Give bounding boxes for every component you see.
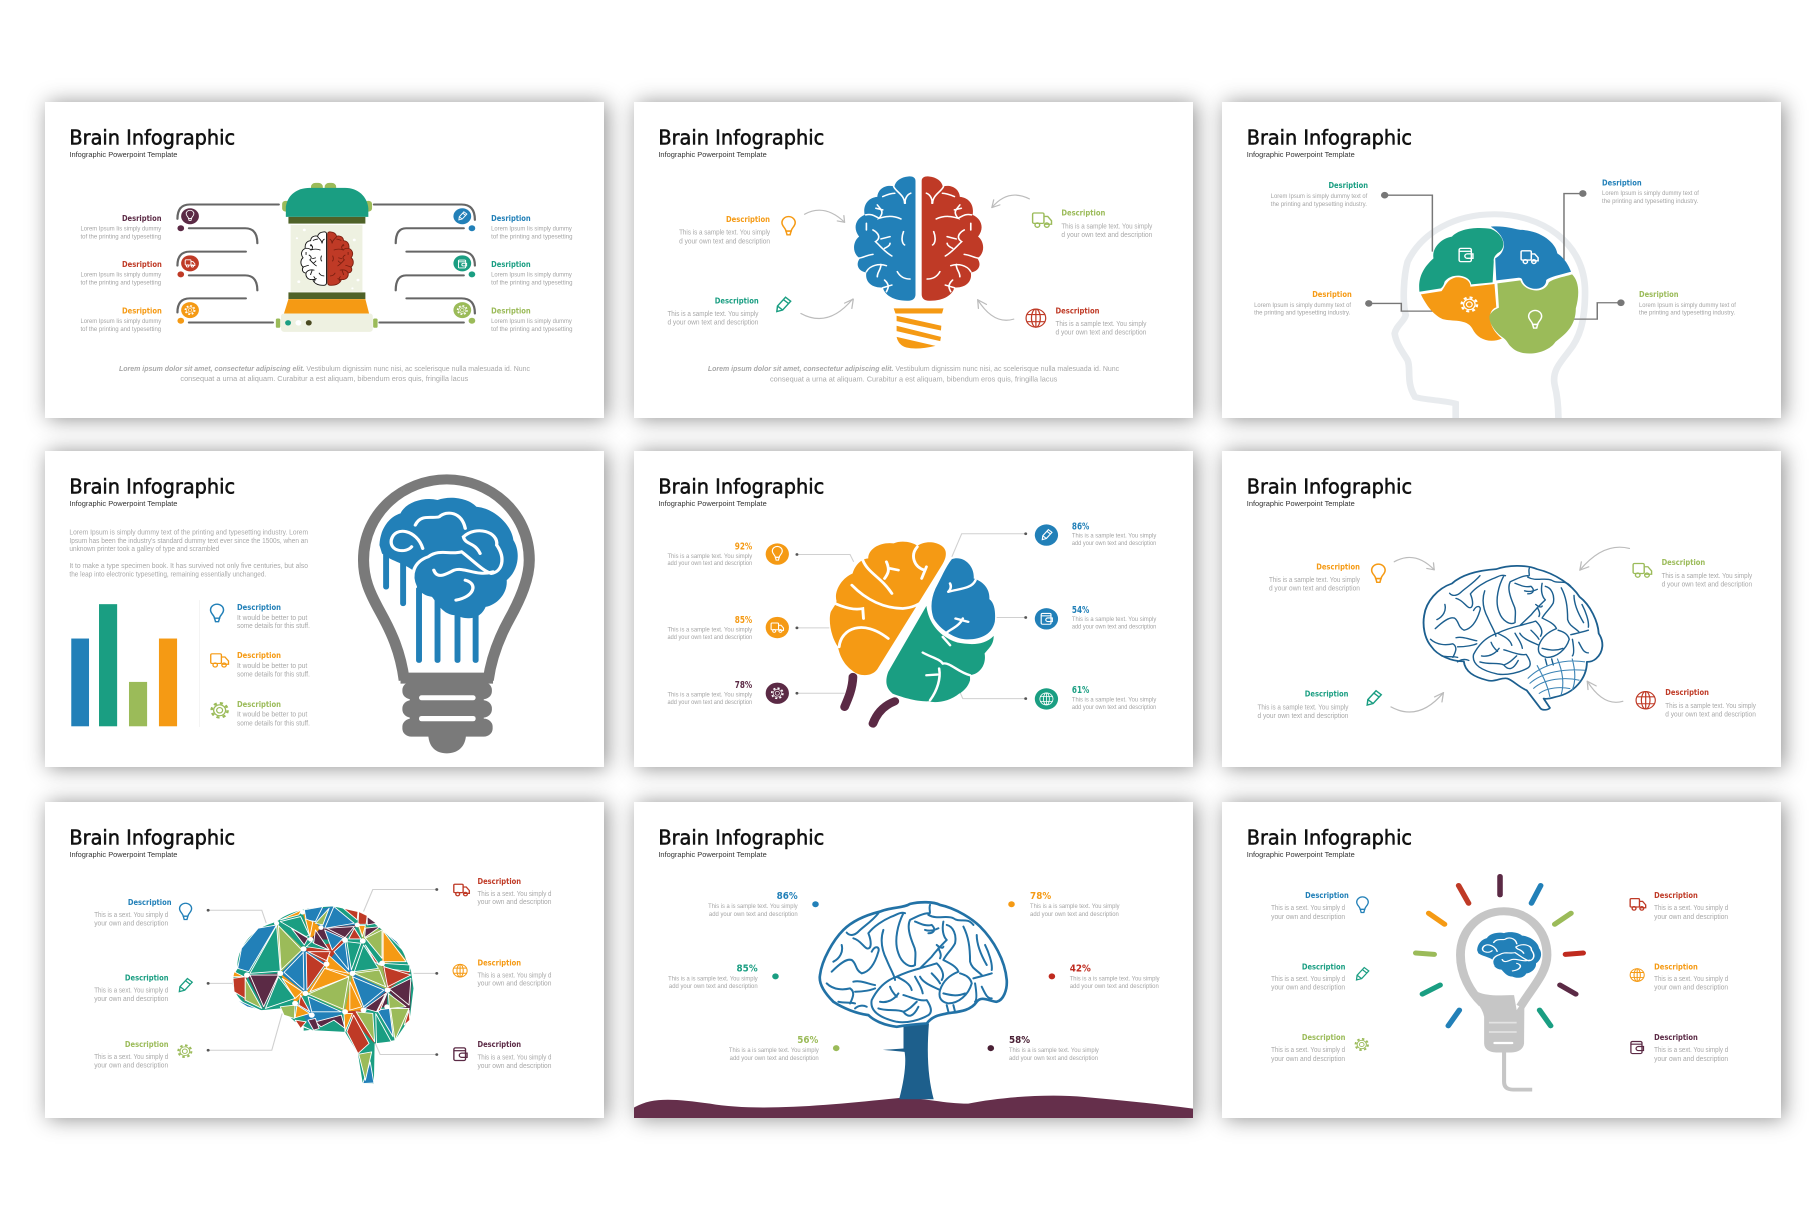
title: Infographic Powerpoint Template bbox=[658, 850, 767, 859]
callout: teal: your own and description bbox=[94, 994, 168, 1003]
callout 86%: add your own text and description bbox=[1072, 540, 1157, 547]
callout: plum: your own and description bbox=[477, 1061, 551, 1070]
callout 78%: 78% bbox=[735, 680, 753, 691]
body text: It to make a type specimen book. It has survived not only five centuries, but also bbox=[69, 561, 308, 570]
callout: green: d your own text and description bbox=[1662, 580, 1752, 588]
callout 54%: 54% bbox=[1072, 604, 1090, 616]
callout: teal bbox=[94, 973, 192, 1003]
panel: polygon brain slide bbox=[45, 802, 604, 1118]
legend: orange bbox=[211, 651, 310, 678]
callout: plum bbox=[454, 1040, 551, 1070]
callout: teal: Description bbox=[715, 297, 759, 305]
callout: blue bbox=[94, 897, 192, 927]
callout: red: Description bbox=[1056, 307, 1100, 315]
callout 86%: add your own text and description bbox=[709, 911, 798, 918]
callout: green: Description bbox=[125, 1039, 169, 1049]
callout: orange: Description bbox=[1654, 962, 1698, 971]
callout: orange: Description bbox=[477, 958, 521, 967]
callout: plum: This is a sext. You simply d bbox=[477, 1053, 551, 1061]
polygon brain bbox=[233, 907, 413, 1084]
callout: orange: your own and description bbox=[1654, 983, 1728, 992]
callout 85%: This is a is sample text. You simply bbox=[668, 976, 758, 982]
callout: blue: This is a sext. You simply d bbox=[94, 910, 168, 919]
callout: green bbox=[94, 1039, 191, 1069]
title bbox=[69, 475, 235, 508]
callout 86%: 86% bbox=[777, 891, 798, 902]
callout: teal: This is a sext. You simply d bbox=[94, 986, 168, 994]
title: Infographic Powerpoint Template bbox=[1247, 499, 1355, 508]
callout: green: Desription bbox=[1639, 289, 1679, 299]
legend: green: Description bbox=[237, 699, 281, 709]
brain canopy bbox=[820, 902, 1007, 1027]
callout: blue: Description bbox=[1305, 891, 1349, 900]
callout 42% bbox=[1049, 963, 1160, 990]
callout: plum: Description bbox=[1654, 1033, 1698, 1042]
left item 1 bbox=[81, 208, 199, 241]
legend: blue: Description bbox=[237, 602, 281, 612]
callout: green: This is a sext. You simply d bbox=[1271, 1046, 1345, 1054]
callout: red: d your own text and description bbox=[1056, 328, 1146, 336]
callout 86% bbox=[708, 891, 819, 918]
callout: red bbox=[1630, 891, 1728, 921]
title: Brain Infographic bbox=[1247, 825, 1412, 849]
tree trunk bbox=[883, 1023, 934, 1099]
callout 61%: 61% bbox=[1072, 684, 1090, 696]
callout: orange: This is a sample text. You simply bbox=[679, 228, 770, 237]
callout 42%: This is a is sample text. You simply bbox=[1070, 976, 1160, 982]
panel: coloured brain with percentages slide bbox=[634, 451, 1193, 767]
callout 56% bbox=[729, 1035, 839, 1062]
callout: blue: your own and description bbox=[1271, 912, 1345, 921]
callout: green: This is a sample text. You simply bbox=[1662, 571, 1752, 580]
brain: teal lobe bbox=[886, 606, 994, 702]
right item 2: Lorem Ipsum Iis simply dummy bbox=[491, 272, 572, 279]
title: Brain Infographic bbox=[1247, 125, 1412, 149]
right item 2 bbox=[453, 255, 573, 287]
callout: red: Description bbox=[477, 876, 521, 886]
callout: teal: Description bbox=[1302, 962, 1346, 971]
callout: green bbox=[1633, 558, 1752, 588]
callout 85% bbox=[668, 963, 779, 990]
callout: orange: d your own text and description bbox=[1269, 584, 1360, 592]
callout 61%: add your own text and description bbox=[1072, 704, 1157, 711]
panel: puzzle brain in head slide bbox=[1222, 102, 1781, 418]
callout: orange: your own and description bbox=[477, 979, 551, 988]
callout: teal: Description bbox=[125, 973, 169, 982]
callout 85%: 85% bbox=[737, 963, 758, 974]
connector lines bbox=[797, 534, 1026, 699]
callout: red: your own and description bbox=[1654, 912, 1728, 921]
left item 2: tof the printing and typesetting bbox=[81, 280, 161, 287]
connector lines bbox=[1369, 194, 1621, 319]
callout: orange: d your own text and description bbox=[679, 237, 770, 245]
right item 1: Lorem Ipsum Iis simply dummy bbox=[491, 226, 572, 233]
callout: orange bbox=[679, 216, 795, 245]
line art brain bbox=[1424, 566, 1602, 710]
legend: orange: Description bbox=[237, 651, 281, 660]
callout: green: d your own text and description bbox=[1061, 230, 1152, 239]
callout: blue bbox=[1271, 891, 1368, 921]
callout: orange: Description bbox=[726, 216, 770, 224]
title bbox=[1247, 475, 1412, 508]
left item 1: tof the printing and typesetting bbox=[81, 234, 161, 241]
callout 86%: This is a sample text. You simply bbox=[1072, 533, 1157, 540]
brain bbox=[1477, 932, 1541, 978]
legend: orange: some details for this stuff. bbox=[237, 670, 310, 678]
right item 2: tof the printing and typesetting bbox=[491, 280, 573, 287]
callout: red: This is a sample text. You simply bbox=[1056, 319, 1147, 328]
callout: red: Description bbox=[1654, 891, 1698, 900]
callout 56%: This is a is sample text. You simply bbox=[729, 1047, 819, 1054]
callout: green: Lorem Ipsum is simply dummy text of bbox=[1639, 302, 1736, 309]
callout: teal: the printing and typesetting industry. bbox=[1271, 201, 1367, 208]
callout: blue: the printing and typesetting industry. bbox=[1602, 198, 1698, 205]
callout 56%: add your own text and description bbox=[730, 1055, 819, 1062]
bulb base bbox=[894, 308, 944, 349]
callout: orange: This is a sample text. You simply bbox=[1269, 575, 1360, 584]
callout 78% bbox=[1008, 891, 1120, 918]
legend: orange: It would be better to put bbox=[237, 662, 307, 670]
callout 61% bbox=[1035, 684, 1157, 711]
callout: orange: Desription bbox=[1312, 289, 1352, 299]
body text: Lorem Ipsum is simply dummy text of the printing and typesetting industry. Lorem bbox=[69, 528, 308, 536]
bulb bbox=[1460, 911, 1547, 1090]
title: Brain Infographic bbox=[69, 825, 235, 849]
callout: teal bbox=[1271, 962, 1369, 992]
callout: red: This is a sext. You simply d bbox=[1654, 904, 1728, 912]
callout: orange: This is a sext. You simply d bbox=[477, 971, 551, 979]
callout: orange: Description bbox=[1316, 562, 1360, 571]
ground bbox=[634, 1096, 1193, 1118]
left item 3 bbox=[81, 302, 199, 333]
callout 54% bbox=[1035, 604, 1157, 630]
callout: green: Description bbox=[1061, 209, 1106, 217]
callout: orange bbox=[1269, 562, 1385, 592]
callout 86%: This is a is sample text. You simply bbox=[708, 903, 798, 910]
callout 85%: 85% bbox=[735, 615, 753, 626]
body text: unknown printer took a galley of type and scrambled bbox=[69, 544, 219, 553]
callout: plum bbox=[1631, 1033, 1728, 1063]
connector lines bbox=[177, 205, 475, 322]
legend: blue: It would be better to put bbox=[237, 613, 307, 622]
callout 58%: add your own text and description bbox=[1009, 1055, 1098, 1062]
callout: orange: This is a sext. You simply d bbox=[1654, 974, 1728, 983]
brain: orange lobe bbox=[830, 542, 946, 675]
panel: jar brain slide bbox=[45, 102, 604, 418]
callout 85%: add your own text and description bbox=[669, 983, 758, 990]
title bbox=[1247, 125, 1412, 159]
callout 78% bbox=[667, 680, 789, 706]
left item 3: Lorem Ipsum Iis simply dummy bbox=[81, 318, 162, 325]
caption: Lorem ipsum dolor sit amet, consectetur adipiscing elit. Vestibulum dignissim nunc nisi, ac scelerisque nulla malesuada id. Nunc bbox=[708, 365, 1119, 373]
right item 1 bbox=[453, 208, 573, 241]
right item 3: tof the printing and typesetting bbox=[491, 326, 573, 333]
title: Brain Infographic bbox=[69, 125, 235, 149]
callout: plum: This is a sext. You simply d bbox=[1654, 1046, 1728, 1054]
title bbox=[69, 125, 235, 159]
callout 42%: add your own text and description bbox=[1070, 983, 1159, 990]
title: Infographic Powerpoint Template bbox=[658, 150, 767, 159]
title: Infographic Powerpoint Template bbox=[1247, 850, 1355, 859]
callout 61%: This is a sample text. You simply bbox=[1072, 696, 1157, 703]
title bbox=[658, 476, 824, 508]
callout 42%: 42% bbox=[1070, 963, 1091, 974]
caption bbox=[708, 365, 1119, 383]
callout 78%: This is a sample text. You simply bbox=[667, 692, 753, 699]
left item 2: Lorem Ipsum Iis simply dummy bbox=[81, 272, 162, 279]
left item 2: Desription bbox=[122, 259, 162, 269]
callout: red: Description bbox=[1665, 688, 1709, 697]
arrows bbox=[801, 195, 1029, 320]
callout: blue: This is a sext. You simply d bbox=[1271, 904, 1345, 912]
callout 92%: add your own text and description bbox=[667, 560, 752, 567]
callout 86% bbox=[1035, 521, 1157, 547]
callout: red bbox=[454, 876, 551, 906]
callout: blue: Desription bbox=[1602, 178, 1642, 187]
left item 1: Desription bbox=[122, 213, 162, 223]
callout 78%: add your own text and description bbox=[667, 699, 752, 706]
callout: teal: d your own text and description bbox=[667, 318, 758, 326]
callout: red: your own and description bbox=[477, 898, 551, 906]
callout: orange bbox=[1254, 289, 1352, 316]
right item 3: Desription bbox=[491, 306, 531, 315]
light rays bbox=[1416, 876, 1583, 1026]
callout: orange bbox=[453, 958, 551, 988]
callout 92% bbox=[667, 541, 789, 567]
callout 85%: This is a sample text. You simply bbox=[667, 627, 753, 633]
callout: blue bbox=[1602, 178, 1699, 205]
callout: green bbox=[1271, 1033, 1368, 1063]
lightbulb with brain bbox=[364, 479, 529, 753]
callout: teal: Desription bbox=[1328, 181, 1368, 190]
callout 78%: add your own text and description bbox=[1030, 911, 1119, 918]
callout: teal: d your own text and description bbox=[1257, 711, 1348, 720]
callout 92%: This is a sample text. You simply bbox=[667, 553, 753, 560]
callout 58%: 58% bbox=[1009, 1035, 1030, 1046]
callout: teal bbox=[1257, 689, 1381, 720]
title bbox=[1247, 825, 1412, 859]
connector lines bbox=[208, 890, 437, 1055]
callout: green: Description bbox=[1662, 558, 1705, 567]
callout: red: This is a sext. You simply d bbox=[477, 889, 551, 898]
callout: blue: Lorem Ipsum is simply dummy text of bbox=[1602, 190, 1699, 197]
callout 58%: This is a is sample text. You simply bbox=[1009, 1047, 1099, 1054]
callout: blue: Description bbox=[128, 897, 172, 907]
title bbox=[658, 126, 824, 159]
legend: green: It would be better to put bbox=[237, 710, 307, 719]
body text: Ipsum has been the industry's standard dummy text ever since the 1500s, when an bbox=[69, 536, 308, 545]
puzzle brain bbox=[1419, 226, 1578, 354]
callout 56%: 56% bbox=[797, 1035, 819, 1046]
jar illustration bbox=[276, 183, 378, 332]
title: Brain Infographic bbox=[658, 126, 824, 149]
left item 2 bbox=[81, 255, 199, 287]
callout: blue: your own and description bbox=[94, 919, 168, 927]
callout: teal bbox=[667, 297, 791, 326]
panel: lightbulb brain and bars slide bbox=[45, 451, 604, 767]
caption: consequat a urna at aliquam. Curabitur a est aliquam, bibendum eros quis, fringilla lacus bbox=[770, 375, 1058, 383]
title bbox=[658, 826, 824, 859]
body text bbox=[69, 528, 308, 578]
head outline bbox=[1395, 214, 1585, 420]
callout: teal bbox=[1271, 181, 1368, 208]
title: Brain Infographic bbox=[1247, 475, 1412, 498]
callout: red bbox=[1026, 307, 1147, 336]
title: Brain Infographic bbox=[658, 476, 824, 498]
callout: orange: Lorem Ipsum is simply dummy text of bbox=[1254, 302, 1351, 309]
callout 85% bbox=[667, 615, 789, 641]
arrows bbox=[1391, 547, 1629, 712]
callout: green: your own and description bbox=[94, 1061, 168, 1069]
callout: orange bbox=[1630, 962, 1728, 992]
callout: red: This is a sample text. You simply bbox=[1665, 701, 1756, 710]
callout: green: Description bbox=[1302, 1033, 1346, 1042]
panel: glowing bulb brain slide bbox=[1222, 802, 1781, 1118]
title: Infographic Powerpoint Template bbox=[69, 499, 177, 508]
callout 85%: add your own text and description bbox=[667, 634, 752, 641]
callout: green: the printing and typesetting industry. bbox=[1639, 310, 1735, 316]
left item 1: Lorem Ipsum Iis simply dummy bbox=[81, 226, 162, 233]
callout: teal: This is a sample text. You simply bbox=[667, 309, 759, 318]
legend: blue: some details for this stuff. bbox=[237, 622, 310, 630]
body text: the leap into electronic typesetting, remaining essentially unchanged. bbox=[69, 570, 266, 578]
title: Infographic Powerpoint Template bbox=[69, 850, 177, 859]
caption bbox=[119, 365, 530, 383]
right item 2: Desription bbox=[491, 259, 531, 269]
callout: teal: your own and description bbox=[1271, 983, 1345, 992]
right item 3: Lorem Ipsum Iis simply dummy bbox=[491, 318, 572, 325]
left item 3: Desription bbox=[122, 306, 162, 315]
brain: two hemispheres bbox=[854, 176, 983, 301]
callout 92%: 92% bbox=[735, 541, 753, 552]
panel: split brain bulb slide bbox=[634, 102, 1193, 418]
title: Brain Infographic bbox=[69, 475, 235, 498]
brain: plum stems bbox=[845, 677, 895, 724]
brain: blue lobe bbox=[931, 558, 995, 639]
callout: green: This is a sext. You simply d bbox=[94, 1052, 168, 1061]
caption: consequat a urna at aliquam. Curabitur a est aliquam, bibendum eros quis, fringilla lacus bbox=[180, 375, 469, 383]
bar chart bbox=[71, 600, 200, 727]
callout: green: This is a sample text. You simply bbox=[1061, 222, 1153, 230]
legend: green bbox=[212, 699, 310, 727]
callout: plum: Description bbox=[477, 1040, 521, 1049]
callout 78%: This is a is sample text. You simply bbox=[1030, 903, 1120, 910]
callout 54%: This is a sample text. You simply bbox=[1072, 616, 1157, 623]
right item 1: tof the printing and typesetting bbox=[491, 234, 573, 241]
callout: teal: This is a sext. You simply d bbox=[1271, 974, 1345, 983]
callout 78%: 78% bbox=[1030, 891, 1052, 902]
callout 54%: add your own text and description bbox=[1072, 624, 1157, 630]
right item 3 bbox=[453, 302, 573, 333]
callout: plum: your own and description bbox=[1654, 1054, 1728, 1063]
left item 3: tof the printing and typesetting bbox=[81, 326, 161, 333]
panel: line art brain slide bbox=[1222, 451, 1781, 767]
callout 86%: 86% bbox=[1072, 521, 1090, 532]
callout: teal: This is a sample text. You simply bbox=[1257, 703, 1349, 712]
legend: blue bbox=[211, 602, 310, 630]
callout: red bbox=[1636, 688, 1756, 719]
panel: brain tree slide bbox=[634, 802, 1193, 1118]
callout: green bbox=[1033, 209, 1153, 239]
callout: orange: the printing and typesetting industry. bbox=[1254, 310, 1350, 316]
title: Brain Infographic bbox=[658, 826, 824, 849]
right item 1: Desription bbox=[491, 213, 531, 223]
callout 58% bbox=[988, 1035, 1099, 1062]
callout: green: your own and description bbox=[1271, 1054, 1345, 1063]
callout: teal: Lorem Ipsum is simply dummy text of bbox=[1271, 193, 1367, 200]
callout: red: d your own text and description bbox=[1665, 710, 1756, 719]
legend: green: some details for this stuff. bbox=[237, 719, 310, 727]
title: Infographic Powerpoint Template bbox=[658, 499, 767, 508]
title: Infographic Powerpoint Template bbox=[1247, 150, 1355, 159]
caption: Lorem ipsum dolor sit amet, consectetur adipiscing elit. Vestibulum dignissim nunc nisi, ac scelerisque nulla malesuada id. Nunc bbox=[119, 365, 530, 373]
callout: green bbox=[1639, 289, 1736, 316]
callout: teal: Description bbox=[1305, 689, 1349, 698]
title bbox=[69, 825, 235, 859]
title: Infographic Powerpoint Template bbox=[69, 150, 177, 159]
